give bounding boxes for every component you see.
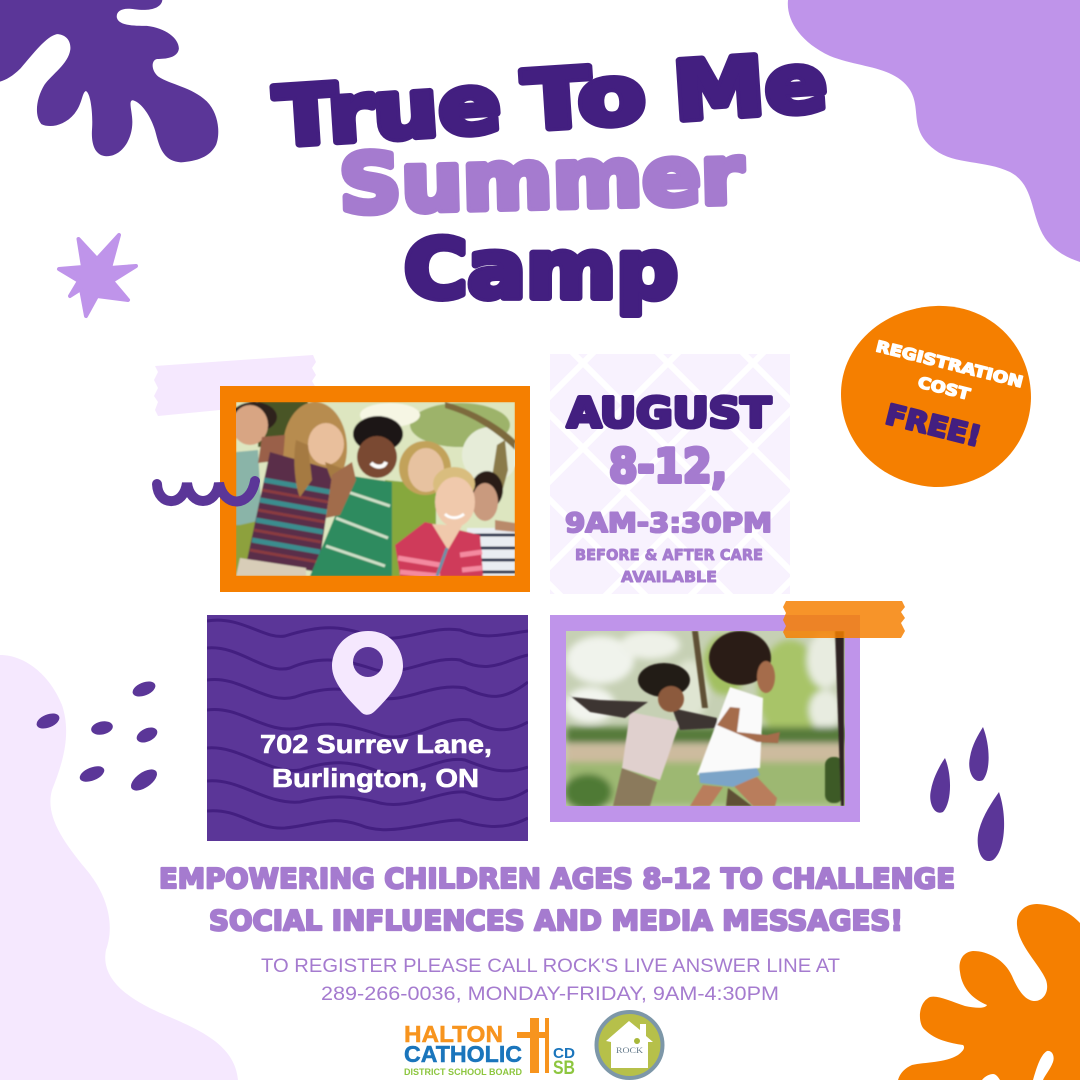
blob: top-left dark purple splat (0, 0, 218, 162)
kid B running (690, 631, 780, 806)
title line: True To Me: Me (670, 36, 830, 140)
text: empowering statement: SOCIAL INFLUENCES AND MEDIA MESSAGES! (209, 904, 903, 937)
text: 8-12: 8-12, (609, 439, 727, 493)
kid 5 (395, 467, 483, 576)
decoration: purple dashes (34, 678, 161, 795)
kid 3 (310, 416, 403, 576)
logo: Halton Catholic District School Board: CD (553, 1045, 575, 1062)
kid 6 (467, 471, 515, 576)
decoration: purple drops (930, 727, 1004, 861)
title line: True To Me (272, 36, 830, 166)
blob: top-right lilac shape (788, 0, 1080, 262)
text: registration: REGISTRATION (874, 337, 1025, 391)
text: registration instructions (261, 956, 840, 1005)
title line: True To Me: True (272, 57, 504, 166)
title line: True To Me: To (520, 48, 648, 150)
logo: Halton Catholic District School Board (404, 1018, 575, 1079)
title line: Camp: Camp (404, 224, 678, 318)
text: before and after care: BEFORE & AFTER CARE (575, 546, 763, 564)
text: empowering statement (159, 862, 955, 937)
kid A running (568, 663, 717, 806)
blob: bottom-right orange splat (898, 904, 1080, 1080)
text: registration instructions: TO REGISTER PLEASE CALL ROCK'S LIVE ANSWER LINE AT (261, 956, 840, 977)
text: free: FREE! (882, 398, 984, 453)
blob: bottom-left pale lilac shape (0, 655, 238, 1080)
text: address line 1: 702 Surrev Lane, (260, 729, 492, 759)
logo: Rock (596, 1012, 662, 1078)
squiggle (157, 481, 255, 502)
title line: Summer: Summer (338, 129, 744, 232)
kid 2 (236, 402, 347, 576)
badge: registration cost free (841, 306, 1031, 487)
panel: location (207, 615, 528, 841)
tape: orange (783, 601, 905, 638)
logo: Halton Catholic District School Board: CATHOLIC (404, 1041, 522, 1067)
text: August: AUGUST (567, 389, 771, 437)
text: registration instructions: 289-266-0036, MONDAY-FRIDAY, 9AM-4:30PM (321, 984, 779, 1005)
text: empowering statement: EMPOWERING CHILDREN AGES 8-12 TO CHALLENGE (159, 862, 955, 895)
text: hours: 9AM-3:30PM (565, 508, 772, 539)
text: available: AVAILABLE (621, 568, 717, 586)
text: address line 2: Burlington, ON (272, 763, 479, 793)
kid 4 (385, 441, 451, 576)
photo: two children running with lilac frame (550, 615, 860, 822)
icon: map pin (332, 631, 403, 715)
logo: Halton Catholic District School Board: HALTON (404, 1021, 503, 1047)
logo: Halton Catholic District School Board: SB (553, 1058, 575, 1079)
photo: group of smiling children with orange frame (220, 386, 530, 592)
kid 1 (231, 402, 277, 525)
logo: Halton Catholic District School Board: DISTRICT SCHOOL BOARD (404, 1067, 522, 1078)
icon: lilac star (59, 235, 136, 316)
tape: pale lilac (154, 355, 316, 416)
text: cost: COST (916, 373, 972, 404)
title (272, 36, 830, 317)
panel: date and time (550, 354, 790, 594)
logo: Rock: ROCK (616, 1046, 643, 1055)
